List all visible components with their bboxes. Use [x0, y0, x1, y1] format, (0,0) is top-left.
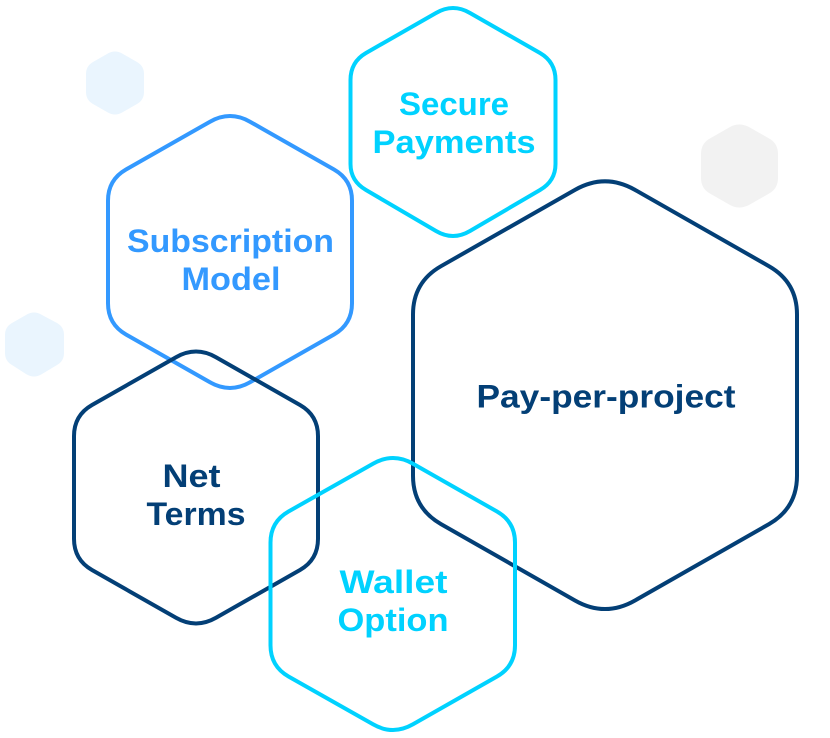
- label: Secure Payments: Payments: [372, 124, 536, 160]
- decorative hexagon: top right: [701, 124, 778, 208]
- label: Subscription Model: Subscription: [127, 223, 334, 259]
- decorative hexagon: top left: [86, 52, 144, 114]
- hexagon: Subscription Model: [108, 116, 352, 388]
- label: Subscription Model: Model: [182, 261, 280, 297]
- label: Wallet Option: Option: [338, 602, 448, 638]
- hexagon: Wallet Option: [270, 458, 515, 730]
- hexagon: Pay-per-project: [413, 181, 797, 609]
- decorative hexagon: left: [5, 312, 64, 376]
- label: Net Terms: [146, 458, 246, 532]
- label: Subscription Model: [127, 223, 334, 297]
- hexagon: Secure Payments: [350, 8, 556, 236]
- label: Net Terms: Net: [162, 458, 221, 494]
- label: Pay-per-project: Pay-per-project: [476, 378, 736, 414]
- label: Secure Payments: Secure: [399, 86, 509, 122]
- label: Secure Payments: [372, 86, 536, 160]
- label: Wallet Option: [338, 564, 448, 638]
- hexagon: Net Terms: [74, 352, 318, 624]
- label: Net Terms: Terms: [146, 496, 246, 532]
- label: Wallet Option: Wallet: [340, 564, 448, 600]
